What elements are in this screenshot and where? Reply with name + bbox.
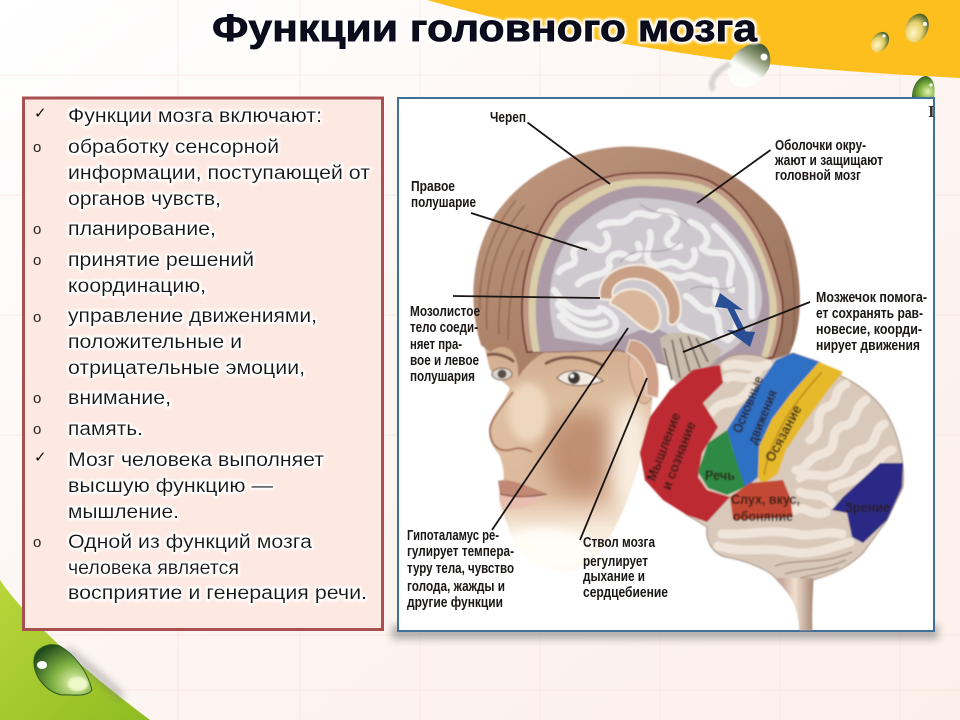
label: corpus callosum: тело соеди- (410, 320, 478, 336)
cortex (550, 198, 762, 358)
corpus callosum (600, 265, 681, 332)
list text: органов чувств, (68, 188, 221, 210)
region labels: Основные (729, 373, 766, 435)
gyri (712, 364, 892, 553)
label: corpus callosum: няет пра- (410, 337, 462, 353)
list text: высшую функцию — (68, 475, 273, 497)
label: corpus callosum: Мозолистое (410, 304, 480, 320)
label: brainstem: дыхание и (583, 569, 645, 585)
bullets: o (33, 139, 41, 156)
list text: внимание, (68, 387, 171, 409)
hair (473, 147, 800, 378)
label: brainstem: сердцебиение (583, 585, 668, 601)
list text: обработку сенсорной (68, 136, 279, 158)
list text: память. (68, 418, 143, 440)
list text: отрицательные эмоции, (68, 357, 305, 379)
label: cerebellum: новесие, коорди- (816, 322, 922, 338)
water drop: lower left (34, 645, 92, 695)
leader lines (453, 122, 810, 540)
list text: принятие решений (68, 249, 254, 271)
bullets: ✓ (34, 448, 47, 466)
label: brainstem: регулирует (583, 554, 648, 570)
brain outline (645, 353, 903, 630)
illustration: head and face (473, 147, 800, 572)
cerebral cortex colored map (640, 353, 903, 630)
title: Функции головного мозга (212, 8, 758, 50)
region: speech (698, 430, 745, 495)
yellow corner shape (427, 0, 960, 78)
bullets: o (33, 252, 41, 269)
water drop: right edge (912, 76, 935, 97)
region labels: обоняние (733, 508, 793, 524)
label: corpus callosum (410, 304, 480, 385)
ear (629, 349, 658, 404)
green corner shape (0, 580, 150, 720)
label: hypothalamus: другие функции (407, 595, 503, 611)
label: brainstem (583, 535, 668, 601)
panel: brain illustration (392, 98, 938, 639)
label: cerebellum: нирует движения (816, 338, 920, 354)
bullets: o (33, 390, 41, 407)
membrane ring (536, 186, 770, 375)
panel: brain illustration: I (928, 102, 935, 121)
list text: управление движениями, (68, 305, 317, 327)
label: hypothalamus: Гипоталамус ре- (407, 528, 499, 544)
list text: Одной из функций мозга (68, 531, 312, 553)
label: cerebellum (816, 290, 927, 354)
region labels: и сознание (658, 419, 699, 492)
list text: человека является (68, 557, 239, 579)
region: hearing, taste, smell (730, 480, 793, 520)
bullets: ✓ (34, 104, 47, 122)
label: membranes: Оболочки окру- (775, 138, 866, 154)
list text: Функции мозга включают: (68, 105, 322, 127)
label: hypothalamus: гулирует темпера- (407, 544, 514, 560)
nose and lips (490, 392, 532, 452)
label: skull: Череп (490, 110, 526, 126)
list text (68, 105, 370, 604)
eyebrows and eyes (487, 354, 604, 366)
region labels: Речь (705, 467, 735, 483)
label: hypothalamus: голода, жажды и (407, 579, 505, 595)
list text: положительные и (68, 331, 242, 353)
region labels: Мышление (643, 410, 684, 483)
label: right hemisphere (411, 179, 476, 211)
bullets: o (33, 221, 41, 238)
label: membranes (774, 138, 883, 184)
skull band (522, 173, 783, 375)
label: corpus callosum: полушария (410, 369, 475, 385)
region labels: Осязание (762, 402, 805, 464)
label: right hemisphere: полушарие (411, 195, 476, 211)
bullets (33, 104, 47, 551)
label: right hemisphere: Правое (411, 179, 455, 195)
bullets: o (33, 309, 41, 326)
cerebellum and brainstem (626, 332, 722, 398)
region labels: Зрение (845, 499, 890, 515)
label: hypothalamus: туру тела, чувство (407, 561, 514, 577)
brainstem (777, 578, 813, 630)
region: thinking and consciousness (640, 365, 730, 522)
list text: планирование, (68, 218, 216, 240)
label: membranes: головной мозг (775, 168, 861, 184)
list text: восприятие и генерация речи. (68, 582, 367, 604)
water drop: small top (867, 28, 893, 56)
face (484, 346, 654, 571)
list text: координацию, (68, 275, 206, 297)
panel: brain functions text (24, 98, 382, 630)
bullets: o (33, 534, 41, 551)
water drop: medium top (901, 10, 933, 46)
label: membranes: жают и защищают (774, 153, 883, 169)
region labels: движения (744, 387, 780, 446)
arrow: blue double arrow (715, 293, 755, 347)
label: cerebellum: Мозжечок помога- (816, 290, 927, 306)
region labels: Слух, вкус, (731, 491, 800, 507)
list text: Мозг человека выполняет (68, 449, 324, 471)
region: vision (832, 463, 903, 543)
list text: мышление. (68, 501, 179, 523)
label: brainstem: Ствол мозга (583, 535, 656, 551)
list text: информации, поступающей от (68, 162, 370, 184)
region: movement (727, 353, 819, 490)
water drop: large top (712, 43, 770, 90)
region: touch (758, 362, 843, 484)
label: cerebellum: ет сохранять рав- (816, 306, 923, 322)
label: hypothalamus (407, 528, 514, 611)
region labels (643, 373, 890, 524)
label: corpus callosum: вое и левое (410, 353, 479, 369)
bullets: o (33, 421, 41, 438)
